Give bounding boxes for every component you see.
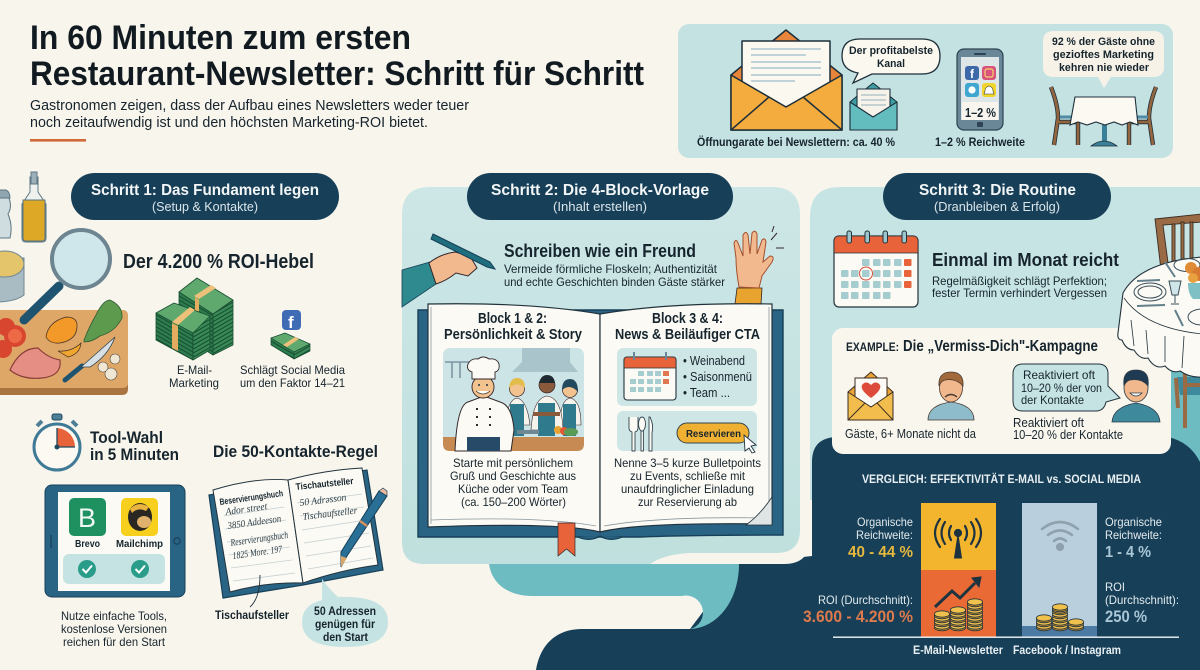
- heading: ROI-Hebel: Der 4.200 % ROI-Hebel: [123, 251, 314, 273]
- text: Nutze einfache Tools: Nutze einfache Tools,: [61, 609, 167, 623]
- labels: social metrics: [1105, 515, 1179, 626]
- text: Starte mit persoenlichem: (ca. 150–200 Wörter): [461, 495, 566, 509]
- title: Restaurant-Newsletter: Schritt für Schritt: [30, 55, 644, 93]
- text: Starte mit persoenlichem: Starte mit persönlichem: [453, 456, 573, 470]
- text: Reaktiviert: Reaktiviert oft: [1013, 416, 1084, 430]
- left page: [428, 304, 600, 532]
- icon: magnifying glass: [24, 230, 110, 320]
- pill: Schritt 2: (Inhalt erstellen): [553, 200, 647, 214]
- text: Nenne Bulletpoints: zu Events, schließe mit: [630, 469, 746, 483]
- bubble: profitabelster Kanal: Der profitabelste: [849, 45, 933, 57]
- icon: phone with social apps: f: [970, 67, 975, 81]
- icon: reservation notebook: 1825 More. 197: [232, 544, 284, 562]
- icon: facebook: [282, 310, 301, 332]
- heading: campaign: Die „Vermiss-Dich"-Kampagne: [903, 338, 1098, 355]
- subtitle: noch zeitaufwendig ist und den höchsten Marketing-ROI bietet.: [30, 114, 428, 131]
- label: Schlägt Social Media: Schlägt Social Media: [240, 363, 345, 377]
- chart: comparison bars: [833, 503, 1179, 638]
- icon: tablet with tools: Brevo: [75, 538, 100, 550]
- icon: sad guest: [928, 372, 974, 420]
- icon: big money stacks: [156, 278, 233, 360]
- icon: large open envelope: [731, 30, 842, 130]
- icon: stopwatch: [34, 414, 80, 470]
- text: Nenne Bulletpoints: unaufdringlicher Einladung: [621, 482, 754, 496]
- text: Regelmaessigkeit: [932, 274, 1107, 300]
- label: Reichweite: 1–2 % Reichweite: [935, 137, 1025, 149]
- text: Vermeide Floskeln: Vermeide förmliche Floskeln; Authentizität: [504, 262, 718, 276]
- labels: social metrics: Organische: [1105, 515, 1162, 529]
- labels: social metrics: Reichweite:: [1105, 528, 1162, 542]
- label: E-Mail-Marketing: Marketing: [169, 376, 219, 390]
- labels: e-mail metrics: 40 - 44 %: [848, 544, 913, 561]
- dark comparison background: [536, 437, 1200, 670]
- labels: social metrics: (Durchschnitt):: [1105, 593, 1179, 607]
- labels: e-mail metrics: ROI (Durchschnitt):: [818, 593, 913, 607]
- button: Reservieren: Reservieren: [686, 428, 741, 440]
- icon: check marks: [78, 560, 149, 578]
- bubble: Reaktiviert: Reaktiviert oft: [1023, 368, 1096, 382]
- bubble: Reaktiviert: 10–20 % der von: [1021, 381, 1102, 395]
- text: Nutze einfache Tools: kostenlose Versionen: [61, 622, 167, 636]
- axis labels: E-Mail-Newsletter: [913, 645, 1003, 657]
- label: Schlägt Social Media: [240, 363, 345, 390]
- text: Nenne Bulletpoints: zur Reservierung ab: [638, 495, 737, 509]
- text: Nutze einfache Tools: [61, 609, 167, 649]
- card: events: [617, 348, 757, 406]
- label: Schlägt Social Media: um den Faktor 14–21: [240, 376, 345, 390]
- card: reservation: [617, 411, 757, 453]
- tablecloth: [1118, 257, 1200, 377]
- pill: Schritt 2: Schritt 2: Die 4-Block-Vorlage: [491, 182, 709, 199]
- icon: weak wifi: [1042, 522, 1078, 550]
- bubble: Reaktiviert: [1013, 364, 1120, 411]
- illustration: kitchen ingredients: [0, 172, 128, 395]
- staff: [506, 375, 581, 436]
- text: Reaktiviert: 10–20 % der Kontakte: [1013, 428, 1123, 442]
- pill: Schritt 1: Schritt 1: Das Fundament legen: [91, 182, 319, 199]
- text: Regelmaessigkeit: Regelmäßigkeit schlägt Perfektion;: [932, 274, 1107, 288]
- bubble: profitabelster Kanal: Kanal: [877, 58, 905, 70]
- bullet list: • Saisonmenü: [683, 370, 752, 384]
- page curl: [746, 497, 772, 525]
- heading: block 1 and 2: Block 1 & 2:: [478, 310, 547, 327]
- bar: E-Mail-Newsletter: [921, 503, 996, 637]
- icon: monthly calendar: [834, 231, 918, 307]
- title: [30, 19, 644, 93]
- vase with flowers: [1185, 262, 1200, 299]
- back chair: [1155, 214, 1200, 270]
- heading: Vergleich: VERGLEICH: EFFEKTIVITÄT E-MAIL vs. SOCIAL MEDIA: [862, 471, 1141, 486]
- icon: cutlery: [629, 417, 653, 451]
- bubble: 50 Adressen: 50 Adressen: [314, 604, 376, 618]
- icon: reservation notebook: Tischautsteller: [295, 476, 354, 493]
- icon: small coins: [1036, 604, 1084, 631]
- icon: Brevo: B: [78, 503, 96, 533]
- icon: facebook: f: [288, 313, 294, 332]
- pill: Schritt 1: (Setup & Kontakte): [152, 200, 258, 214]
- food on counter: [517, 426, 578, 436]
- heading: block 3 and 4: News & Beiläufiger CTA: [615, 326, 760, 343]
- heading: Tool-Wahl: Tool-Wahl: [90, 429, 163, 447]
- icon: reservation notebook: Reservierungsbuch: [229, 530, 289, 549]
- heading: Einmal im Monat: Einmal im Monat reicht: [932, 250, 1119, 270]
- heading: block 1 and 2: [444, 310, 583, 343]
- labels: e-mail metrics: 3.600 - 4.200 %: [803, 608, 913, 626]
- subtitle: Gastronomen zeigen, dass der Aufbau eines Newsletters weder teuer: [30, 97, 469, 114]
- heading: Schreiben wie ein Freund: Schreiben wie ein Freund: [504, 241, 696, 261]
- labels: social metrics: 1 - 4 %: [1105, 544, 1151, 561]
- teal wave: [489, 564, 739, 629]
- bubble: 92 Prozent: [1043, 31, 1164, 88]
- panel: step 2 background: [402, 187, 810, 564]
- icon: Mailchimp: [121, 498, 158, 536]
- heading: campaign: [846, 338, 1098, 355]
- open book: [418, 304, 783, 556]
- icon: waving hand: [734, 226, 784, 304]
- icon: reservation notebook: 3850 Addeeson: [226, 514, 282, 532]
- chef: [455, 357, 514, 451]
- icon: writing hand: [402, 234, 495, 307]
- icon: reservation notebook: Ador street: [224, 501, 268, 518]
- pill: Schritt 3: (Dranbleiben & Erfolg): [934, 200, 1060, 214]
- icon: reservation notebook: Tischaufsteller: [302, 505, 358, 523]
- icon: small teal envelope: [850, 83, 897, 130]
- label: E-Mail-Marketing: [169, 363, 219, 390]
- labels: e-mail metrics: Reichweite:: [856, 528, 913, 542]
- text: Vermeide Floskeln: und echte Geschichten binden Gäste stärker: [504, 275, 725, 289]
- icon: small table with chairs: [1051, 87, 1156, 146]
- icon: antenna: [935, 519, 981, 558]
- panel: step 3 background: [810, 187, 1200, 500]
- icon: pot: [0, 251, 24, 302]
- bubble: profitabelster Kanal: [842, 39, 940, 83]
- bubble: 50 Adressen: [302, 579, 388, 647]
- label: Tischaufsteller: [215, 575, 289, 622]
- heading: campaign: EXAMPLE:: [846, 342, 899, 354]
- pill: Schritt 1: [71, 173, 339, 220]
- text: Starte mit persoenlichem: [450, 456, 576, 509]
- text: Nenne Bulletpoints: Nenne 3–5 kurze Bulletpoints: [614, 456, 761, 470]
- bar: Facebook / Instagram: [1022, 503, 1097, 637]
- icon: tablet with tools: Mailchimp: [116, 538, 163, 550]
- icon: reservation notebook: Beservierungshuch: [219, 488, 284, 507]
- bullet list: [683, 354, 752, 400]
- title: In 60 Minuten zum ersten: [30, 19, 411, 57]
- icon: cursor: [744, 435, 756, 453]
- heading: block 3 and 4: Block 3 & 4:: [652, 310, 723, 327]
- illustration: restaurant table: [1118, 214, 1200, 428]
- bubble: 50 Adressen: genügen für: [315, 617, 375, 631]
- label: E-Mail-Marketing: E-Mail-: [177, 363, 212, 377]
- bookmark: [558, 523, 575, 556]
- bubble: 92 Prozent: kehren nie wieder: [1059, 62, 1150, 74]
- bubble: 92 Prozent: gezioftes Marketing: [1053, 49, 1154, 61]
- icon: growth arrow: [935, 577, 981, 607]
- heading: block 3 and 4: [615, 310, 760, 343]
- icon: coins: [934, 599, 983, 631]
- pill: Schritt 3: Schritt 3: Die Routine: [919, 182, 1076, 199]
- right dark teal strip: [1170, 360, 1200, 480]
- text: Reaktiviert: [1013, 416, 1123, 442]
- label: Gaeste 6+ Monate: Gäste, 6+ Monate nicht da: [845, 427, 976, 441]
- icon: happy guest: [1112, 370, 1160, 422]
- labels: social metrics: ROI: [1105, 580, 1125, 594]
- text: Vermeide Floskeln: [504, 262, 725, 289]
- labels: e-mail metrics: [803, 515, 913, 626]
- bubble: 92 Prozent: 92 % der Gäste ohne: [1052, 36, 1155, 48]
- bullet list: • Weinabend: [683, 354, 745, 368]
- front chair: [1176, 343, 1200, 428]
- label: Tischaufsteller: Tischaufsteller: [215, 608, 289, 622]
- icon: heart envelope: [848, 372, 893, 420]
- bubble: 50 Adressen: den Start: [323, 630, 368, 644]
- subtitle: [30, 97, 469, 131]
- icon: reservation notebook: 50 Adrəsson: [299, 492, 347, 509]
- icon: phone with social apps: 1–2 %: [965, 105, 996, 120]
- pill: Schritt 2: [467, 173, 733, 220]
- label: Öffnungsrate: Öffnungarate bei Newslettern: ca. 40 %: [697, 136, 895, 149]
- labels: e-mail metrics: Organische: [857, 515, 913, 529]
- heading: block 1 and 2: Persönlichkeit & Story: [444, 326, 583, 343]
- heading: Tool-Wahl: in 5 Minuten: [90, 446, 179, 464]
- icon: reservation notebook: [209, 468, 387, 598]
- pill: Schritt 3: [883, 173, 1111, 220]
- text: Nenne Bulletpoints: [614, 456, 761, 509]
- axis labels: [913, 645, 1121, 657]
- illustration: chef and team in kitchen: [443, 348, 584, 451]
- axis labels: Facebook / Instagram: [1013, 645, 1121, 657]
- labels: social metrics: 250 %: [1105, 608, 1147, 626]
- bubble: Reaktiviert: der Kontakte: [1021, 393, 1084, 407]
- icon: tablet with tools: [45, 485, 185, 597]
- heading: 50-Kontakte-Regel: Die 50-Kontakte-Regel: [213, 443, 378, 461]
- icon: small money stack: [271, 333, 310, 359]
- heading: Tool-Wahl: [90, 429, 179, 464]
- icon: cutting board: [0, 300, 128, 395]
- icon: oil bottle: [22, 172, 46, 242]
- text: Starte mit persoenlichem: Gruß und Geschichte aus: [450, 469, 576, 483]
- icon: pen: [341, 488, 387, 567]
- place setting: [1134, 258, 1200, 326]
- bullet list: • Team ...: [683, 386, 730, 400]
- icon: calendar: [624, 352, 676, 400]
- icon: pepper shaker: [0, 190, 11, 238]
- card: Vermiss-Dich campaign: [832, 328, 1171, 454]
- right page: [600, 304, 772, 532]
- text: Nutze einfache Tools: reichen für den Start: [63, 635, 166, 649]
- text: Starte mit persoenlichem: Küche oder vom Team: [458, 482, 568, 496]
- text: Regelmaessigkeit: fester Termin verhindert Vergessen: [932, 286, 1107, 300]
- panel: top statistics: [678, 24, 1173, 158]
- icon: phone with social apps: [957, 49, 1003, 130]
